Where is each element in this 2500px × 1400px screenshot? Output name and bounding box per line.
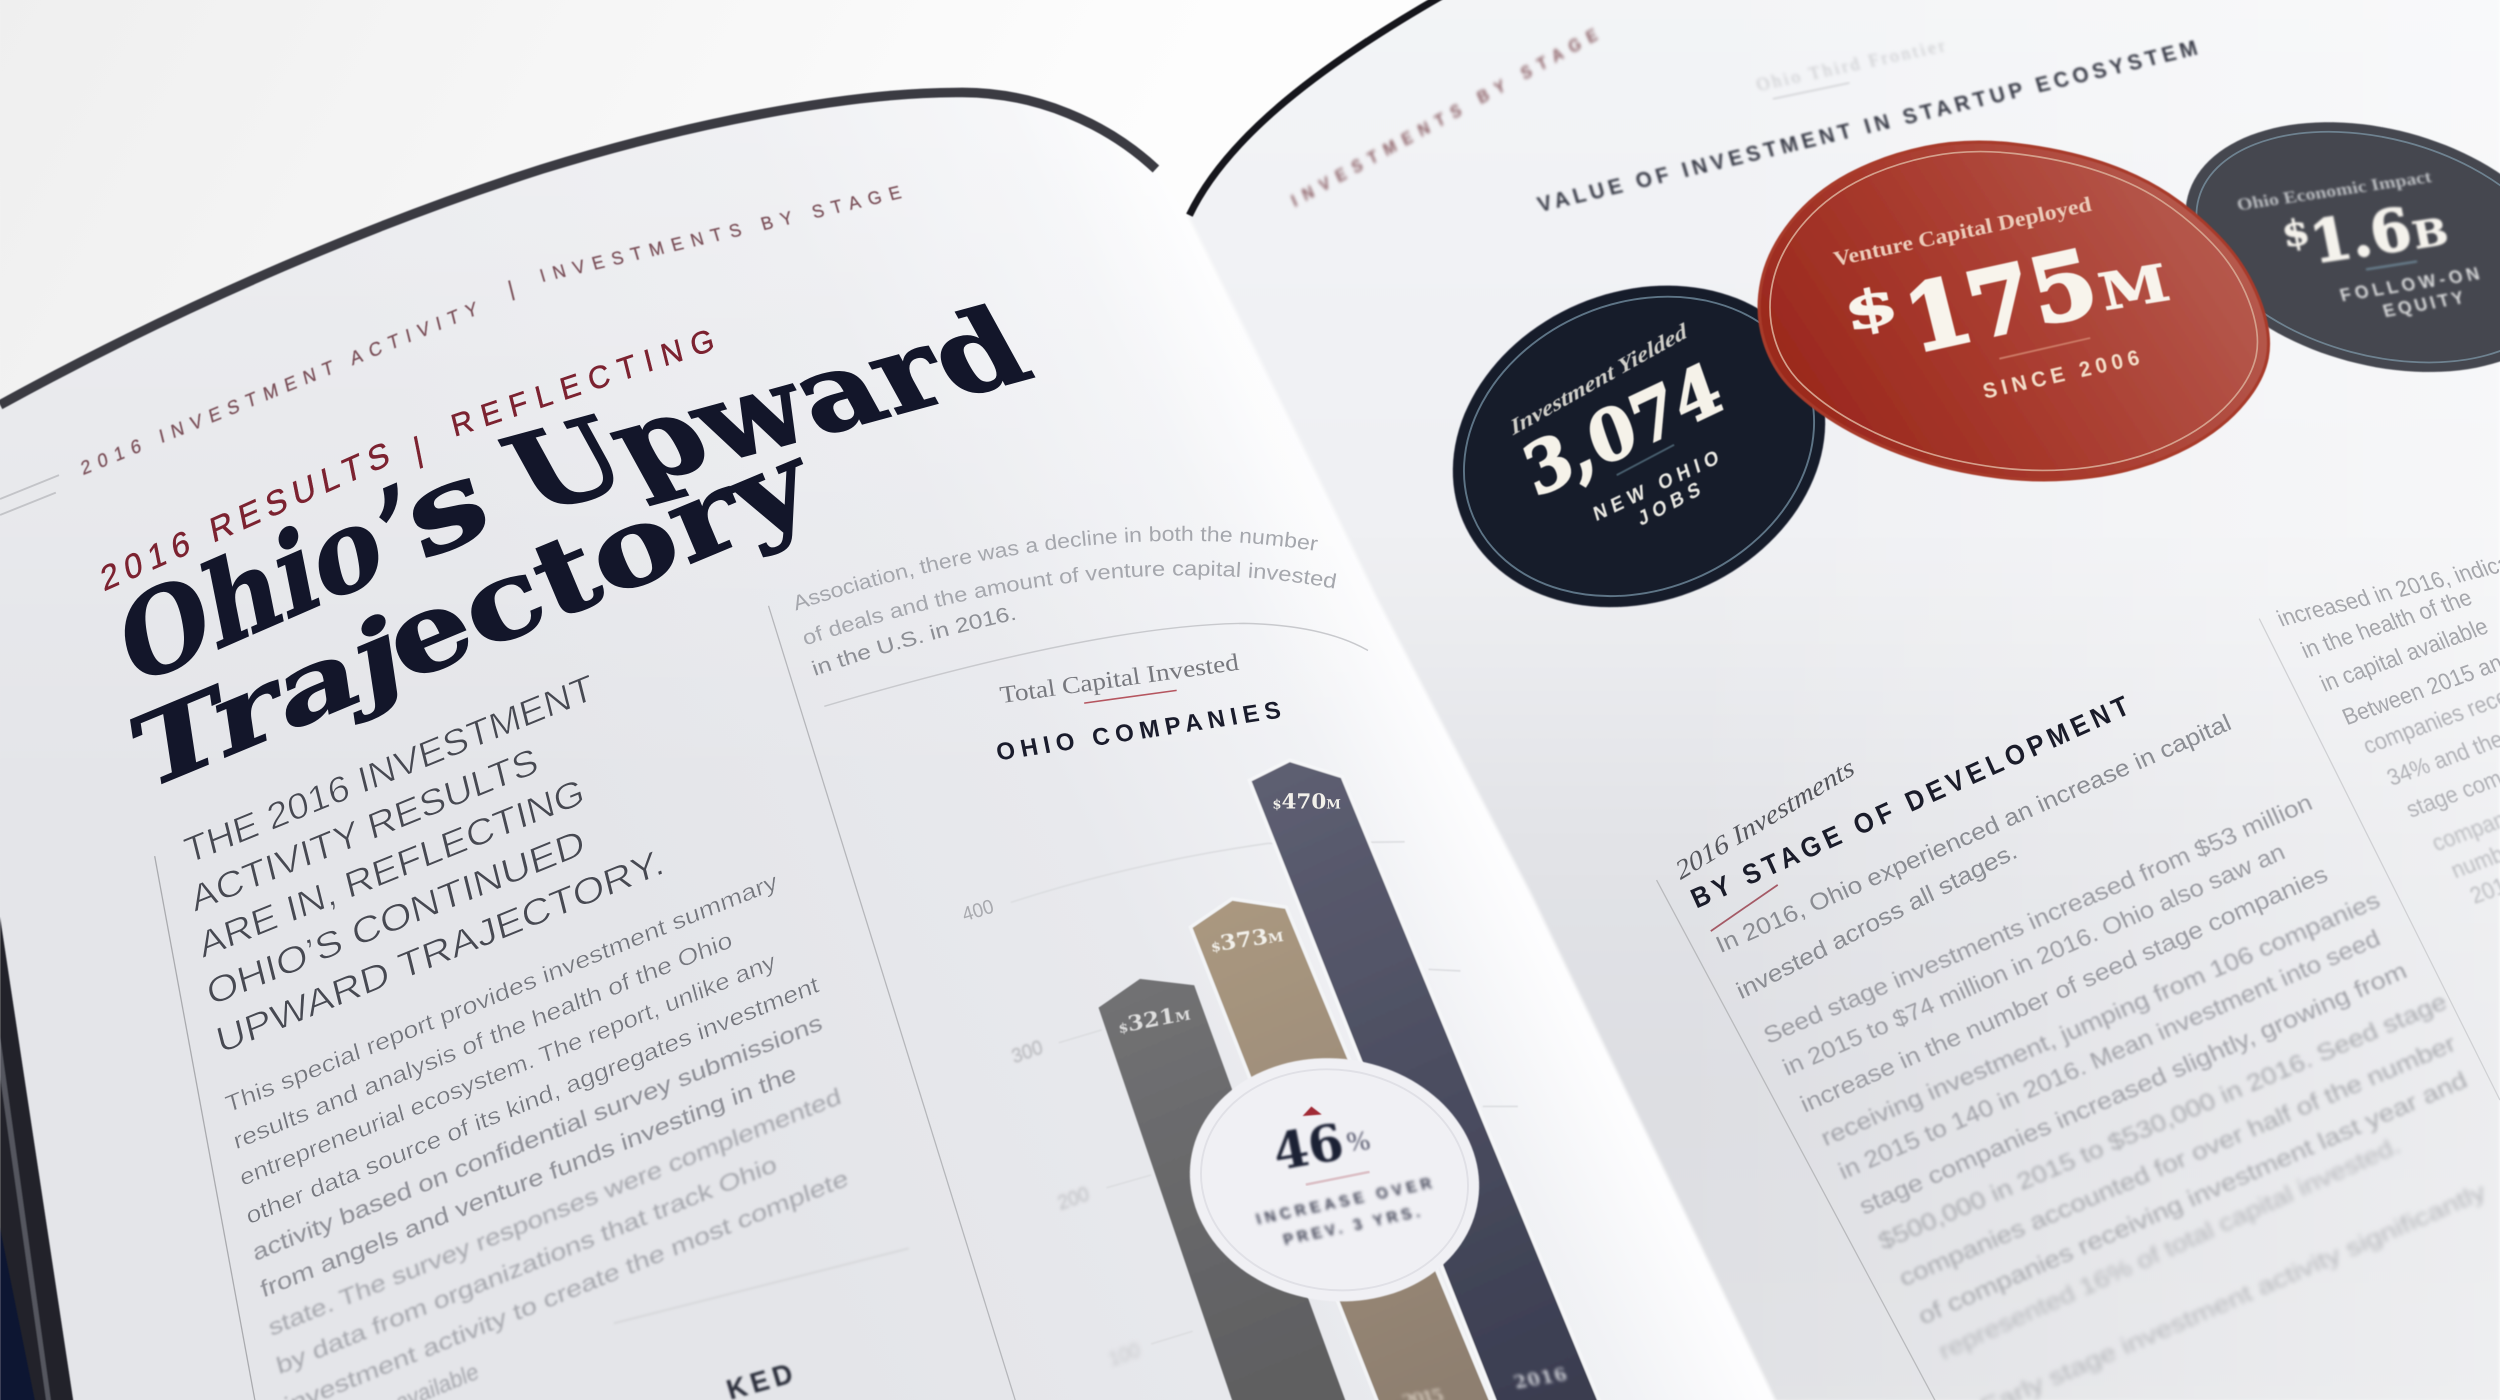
kicker: 2016 RESULTS	[98, 435, 392, 599]
column rule 2	[769, 606, 1016, 1400]
title: Upward	[483, 284, 1050, 537]
label: NEW OHIO	[1591, 445, 1721, 526]
bar 2014	[1099, 979, 1346, 1400]
bar 2016	[1252, 762, 1598, 1400]
label: $	[2278, 211, 2313, 257]
panel: left page	[0, 60, 1816, 1400]
column rule 4	[2259, 619, 2500, 1100]
body text left column: from angels and venture funds investing in the	[258, 1059, 799, 1303]
section heading: by stage: BY STAGE OF DEVELOPMENT	[1687, 692, 2134, 915]
body text: by stage	[1712, 709, 2490, 1400]
body text left column: entrepreneurial ecosystem. The report, unlike any	[237, 947, 778, 1191]
section rule	[824, 623, 1368, 706]
title	[110, 284, 1050, 816]
intro statement: OHIO’S CONTINUED	[203, 821, 589, 1014]
intro statement	[180, 666, 668, 1062]
label: B	[2409, 210, 2452, 258]
running header: 2016 INVESTMENT ACTIVITY	[79, 299, 480, 480]
body text: right column: in capital available	[2316, 613, 2492, 697]
body text: by stage: $500,000 in 2015 to $530,000 in 2016. Seed stage	[1874, 988, 2451, 1255]
body text left column: results and analysis of the health of the Ohio	[230, 926, 735, 1154]
body text left column	[222, 867, 851, 1400]
column rule 3	[1657, 880, 1936, 1400]
axis labels: 200	[1055, 1182, 1092, 1215]
bar values	[1117, 791, 1341, 1040]
title: Ohio’	[110, 456, 426, 714]
intro statement: UPWARD TRAJECTORY.	[212, 840, 668, 1062]
intro statement: ACTIVITY RESULTS	[187, 739, 542, 920]
bar chart	[959, 762, 1598, 1400]
percentage: %	[1344, 1125, 1372, 1157]
grid lines	[1011, 842, 1518, 1344]
label: $	[1839, 275, 1903, 344]
continued column text: Association, there was a decline in both the number	[796, 526, 1318, 610]
section heading: by stage: 2016 Investments	[1672, 754, 1859, 886]
panel: right page	[1188, 0, 2500, 1400]
body text: by stage: stage companies increased slightly, growing from	[1855, 957, 2411, 1220]
kicker: REFLECTING	[448, 324, 718, 445]
column rule 1	[155, 856, 255, 1400]
label: JOBS	[1635, 477, 1703, 531]
callout caption: PREV. 3 YRS.	[1281, 1204, 1422, 1250]
label: Ohio Economic Impact	[2235, 169, 2435, 215]
label: EQUITY	[2381, 288, 2468, 322]
bar values: $321M	[1117, 1002, 1192, 1040]
running header: INVESTMENTS BY STAGE	[1289, 26, 1601, 212]
running header: |	[505, 276, 517, 301]
page top edge	[0, 92, 1156, 405]
running header: INVESTMENTS BY STAGE	[538, 184, 904, 287]
body text: by stage: in 2015 to $74 million in 2016. Ohio also saw an	[1779, 838, 2289, 1081]
label: SINCE 2006	[1980, 345, 2142, 403]
axis labels: 300	[1009, 1035, 1046, 1068]
label: 1.6	[2305, 196, 2417, 277]
callout caption: INCREASE OVER	[1254, 1175, 1434, 1229]
body text: by stage: receiving investment, jumping from 106 companies	[1817, 886, 2384, 1151]
section title: VALUE OF INVESTMENT IN STARTUP ECOSYSTEM	[1534, 35, 2200, 217]
body text left column: This special report provides investment summary	[222, 867, 780, 1118]
label: Venture Capital Deployed	[1831, 191, 2095, 271]
label: FOLLOW-ON	[2338, 265, 2482, 306]
body text: by stage: of companies receiving investment last year and	[1914, 1067, 2471, 1330]
axis labels	[959, 894, 1143, 1371]
body text: by stage: increase in the number of seed stage companies	[1796, 861, 2332, 1118]
body text: right column: in the health of the	[2297, 584, 2476, 663]
title: Traj	[126, 590, 409, 816]
body text: by stage: in 2015 to 140 in 2016. Mean investment into seed	[1834, 925, 2384, 1185]
label	[1831, 191, 2175, 403]
bar values: $470M	[1272, 791, 1341, 815]
body text left column: other data source of its kind, aggregates investment	[243, 970, 822, 1229]
bar 2015	[1193, 901, 1489, 1400]
stat circle: new ohio jobs	[1402, 229, 1876, 664]
icon: up triangle	[1303, 1106, 1322, 1116]
callout: 46 percent	[1174, 1040, 1495, 1320]
title: s	[391, 429, 502, 588]
body text: by stage: represented 16% of total capital invested.	[1935, 1132, 2404, 1365]
body text: right column	[2273, 542, 2500, 909]
body text: by stage: In 2016, Ohio experienced an increase in capital	[1712, 709, 2235, 958]
section heading	[1534, 35, 2200, 217]
intro statement: THE 2016 INVESTMENT	[180, 666, 598, 872]
chart heading	[994, 650, 1283, 767]
bar year labels: 2016	[1511, 1364, 1570, 1393]
axis labels: 400	[959, 894, 997, 926]
chart subtitle: OHIO COMPANIES	[994, 697, 1283, 767]
body text left column: by data from organizations that track Ohio	[273, 1150, 780, 1379]
label	[2235, 169, 2482, 322]
body text: by stage: companies accounted for over half of the number	[1895, 1030, 2461, 1291]
label: 3,074	[1514, 347, 1731, 513]
title: ectory	[366, 416, 832, 706]
book edge	[0, 917, 73, 1400]
stat circle: venture capital	[1759, 142, 2269, 480]
axis labels: 100	[1106, 1338, 1143, 1371]
body text: by stage: Seed stage investments increased from $53 million	[1760, 789, 2316, 1049]
body text: by stage: invested across all stages.	[1732, 837, 2021, 1004]
lower left rule	[614, 1248, 909, 1323]
running header	[79, 184, 904, 480]
kicker: |	[410, 431, 426, 470]
continued column text	[762, 486, 1362, 701]
page top edge	[1189, 0, 1443, 215]
label: 175	[1894, 229, 2107, 373]
section heading: Ohio Third Frontier	[1754, 36, 1948, 96]
label: M	[2093, 254, 2175, 323]
label: Investment Yielded	[1506, 317, 1690, 441]
kicker	[98, 324, 718, 599]
body text left column: state. The survey responses were complemented	[265, 1082, 844, 1341]
chart heading: Total Capital Invested	[998, 650, 1241, 709]
continued column text: of deals and the amount of venture capital invested	[804, 560, 1336, 644]
percentage: 46	[1268, 1114, 1349, 1183]
bar year labels	[1400, 1364, 1570, 1400]
intro statement: ARE IN, REFLECTING	[195, 770, 588, 966]
bar values: $373M	[1209, 923, 1285, 958]
decorative rules	[0, 475, 59, 515]
continued column text: in the U.S. in 2016.	[812, 608, 1016, 676]
body text left column: activity based on confidential survey submissions	[250, 1008, 825, 1266]
stat circle: follow-on equity	[2157, 82, 2500, 412]
